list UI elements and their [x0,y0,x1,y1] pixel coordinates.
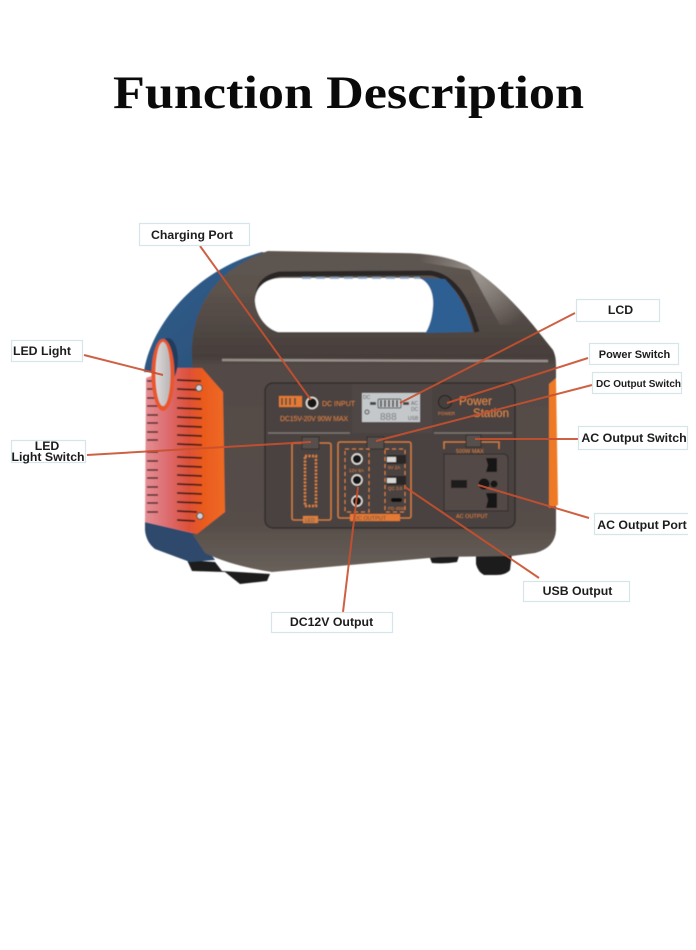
LCD screen: USB [408,416,419,422]
LCD screen: 888 [380,412,397,423]
label: USB Output: USB Output [543,584,612,598]
side vents [147,380,202,521]
power station device [144,251,558,584]
label: Charging Port [140,224,250,246]
label: DC Output Switch [592,372,682,394]
feet [187,553,512,584]
LED switch and icon: LED [305,518,315,524]
DC input block: DC INPUT [322,401,356,408]
DC output group: 9V 2A [388,465,400,470]
body shell [192,251,556,572]
power button and brand [438,396,509,420]
orange side panel [145,368,225,534]
AC output socket: AC OUTPUT [456,514,488,520]
power button and brand: Power [459,396,492,408]
LCD screen: DC [363,395,371,401]
label: DC12V Output [272,612,392,632]
DC output group: DC OUTPUT [354,516,387,522]
label: LED Light Switch [11,439,86,464]
callout lines [84,246,592,612]
blue rear shell [144,252,300,380]
side screws [196,385,202,391]
blue inner handle [418,278,473,333]
DC output group: 12V 8A [349,468,364,473]
DC input block: DC15V-20V 90W MAX [280,416,348,423]
handle opening [255,278,433,332]
handle dark inner ring [258,273,477,332]
control panel [265,383,515,528]
handle highlight [420,254,533,325]
label: AC Output Switch [578,426,688,450]
label: USB Output [524,582,630,602]
label: DC12V Output: DC12V Output [290,615,373,629]
label: LED Light Switch: Light Switch [11,450,85,464]
LED switch and icon [292,437,331,524]
AC output socket [444,435,508,520]
label: AC Output Port [594,514,688,534]
DC output group: QC 3.0 [388,486,403,491]
DC input block [279,396,356,423]
label: Power Switch: Power Switch [599,349,671,361]
front ridge [222,360,548,361]
label: Charging Port: Charging Port [151,228,233,242]
DC output group: PD 45W [388,506,406,511]
right orange strip [549,378,558,508]
LCD screen [362,393,420,423]
label: LCD [576,300,660,322]
label: LCD: LCD [608,303,633,317]
power button and brand: Station [473,408,509,420]
LCD screen: AC [411,401,418,407]
LED light disc [152,338,178,411]
LCD screen: DC [411,407,419,413]
label: LED Light Switch: LED [35,439,59,453]
label: DC Output Switch: DC Output Switch [596,379,681,390]
DC output group [338,437,411,522]
label: LED Light [12,340,82,362]
label: Power Switch [590,344,678,364]
label: AC Output Switch: AC Output Switch [581,431,687,445]
AC output socket: 500W MAX [456,449,484,455]
power button and brand: POWER [438,411,456,416]
title: Function Description [113,67,584,119]
label: LED Light: LED Light [13,344,71,358]
handle grip highlights [302,277,420,279]
label: AC Output Port: AC Output Port [597,518,687,532]
